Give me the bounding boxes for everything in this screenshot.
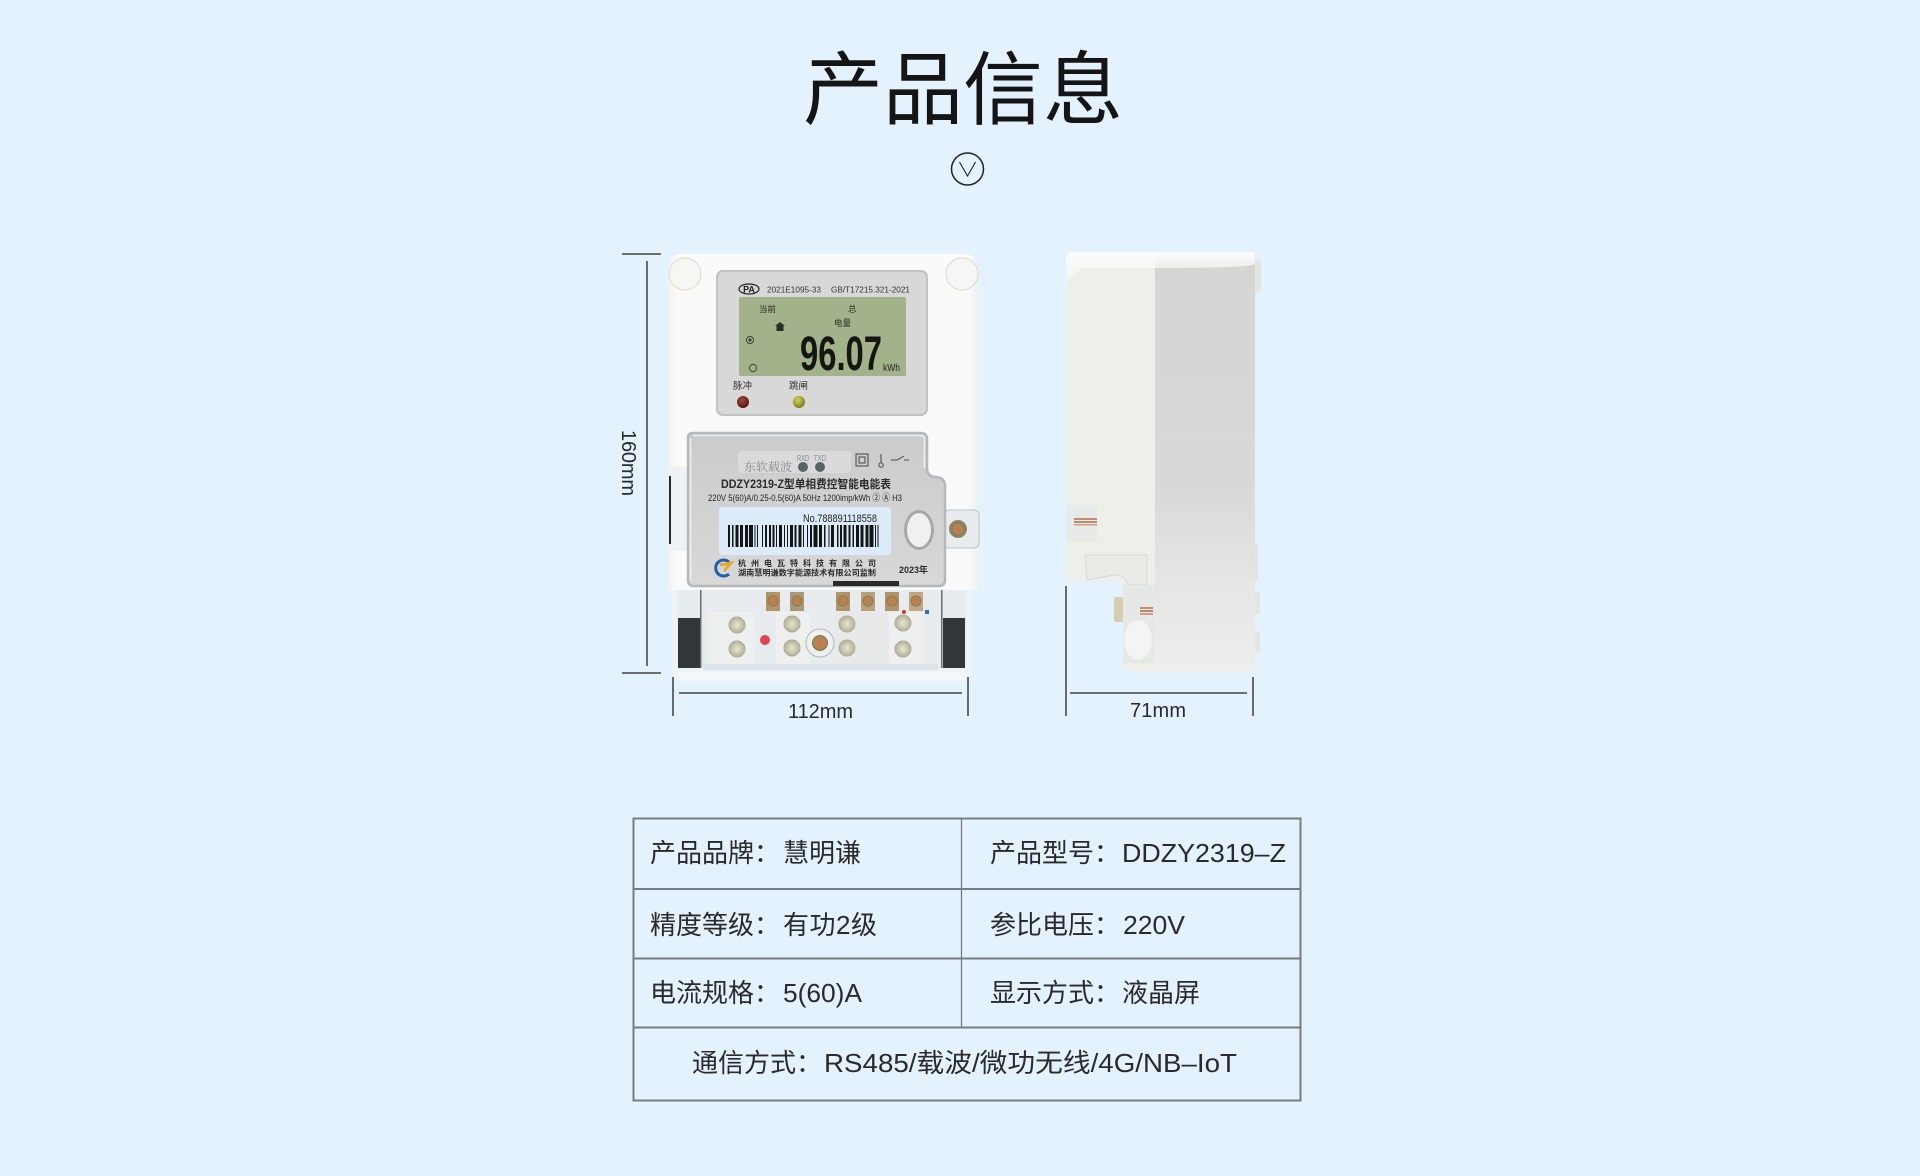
cell: voltage: 参比电压： — [990, 910, 1120, 940]
cell: accuracy — [650, 910, 877, 940]
dimension: 112mm: 112mm — [788, 701, 853, 723]
model name: DDZY2319-Z型单相费控智能电能表 — [721, 477, 891, 491]
supervisor: 湖南慧明谦数字能源技术有限公司监制 — [738, 568, 876, 578]
casing left — [1066, 252, 1156, 672]
certificate number: 2021E1095-33 — [767, 286, 822, 294]
cell: accuracy: 有功2级 — [783, 910, 877, 940]
screw block — [944, 510, 979, 548]
carrier module label: 东软载波 — [744, 458, 792, 475]
RJ connector — [1066, 505, 1097, 542]
dimension: 160mm — [617, 254, 661, 673]
ratings: 220V 5(60)A/0.25-0.5(60)A 50Hz 1200imp/kWh ② Ⓐ H3 — [708, 493, 902, 504]
clip emboss — [1085, 555, 1147, 585]
pulse label: 脉冲 — [733, 380, 752, 392]
LCD screen: 总 — [848, 304, 857, 314]
cell: display: 液晶屏 — [1122, 978, 1200, 1008]
cell: display: 显示方式： — [990, 978, 1120, 1008]
terminal cover — [672, 586, 972, 682]
table: product specifications — [634, 818, 1300, 1100]
cell: voltage: 220V — [1123, 910, 1186, 940]
LCD panel — [717, 271, 927, 415]
carrier module label: RXD — [797, 454, 809, 463]
icon: logo — [716, 560, 731, 576]
icon: switch — [891, 456, 909, 460]
top terminals — [766, 592, 923, 611]
icon: double square — [856, 454, 868, 466]
cell: model: 产品型号： — [990, 838, 1120, 868]
cell: current — [650, 978, 863, 1008]
trip label: 跳闸 — [789, 380, 808, 392]
cell: display — [990, 978, 1200, 1008]
carrier module label: TXD — [814, 454, 826, 463]
corner screw covers — [669, 258, 978, 290]
cell: accuracy: 精度等级： — [650, 910, 780, 940]
side tabs — [1253, 259, 1261, 653]
icon: PA mark: PA — [743, 284, 755, 294]
cell: model: DDZY2319–Z — [1122, 838, 1286, 868]
top band — [1066, 252, 1255, 290]
cell: current: 电流规格： — [650, 978, 780, 1008]
cell: brand: 慧明谦 — [783, 838, 861, 868]
standard number: GB/T17215.321-2021 — [831, 286, 911, 294]
icon: PA mark — [739, 284, 759, 294]
LCD screen: 电量 — [834, 318, 852, 328]
clear block — [1114, 585, 1155, 663]
LCD screen: 96.07 — [800, 328, 882, 381]
side clip — [668, 467, 690, 551]
manufacturer: 杭州电瓦特科技有限公司 — [738, 558, 876, 568]
casing right — [1155, 252, 1255, 672]
carrier module label — [738, 451, 851, 475]
icon: thermometer — [879, 454, 883, 467]
push button — [904, 510, 934, 550]
cell: communication: 通信方式： — [692, 1048, 822, 1078]
LCD screen: kWh — [883, 363, 900, 374]
dimension: 112mm — [673, 677, 968, 723]
LCD screen — [739, 297, 906, 381]
pulse LED — [737, 396, 749, 408]
icon: chevron in circle — [952, 153, 984, 185]
cell: current: 5(60)A — [783, 978, 863, 1008]
LCD screen: 当前 — [759, 304, 777, 314]
nameplate — [688, 433, 945, 586]
year: 2023年 — [899, 564, 928, 575]
trip LED — [793, 396, 805, 408]
terminal screws — [728, 610, 929, 658]
meter body — [668, 254, 978, 590]
cell: voltage — [990, 910, 1186, 940]
dimension: 71mm: 71mm — [1130, 700, 1186, 722]
title: 产品信息 — [803, 26, 1123, 142]
panel: front view of meter — [668, 254, 979, 682]
cell: model — [990, 838, 1286, 868]
barcode label: No.788891118558 — [803, 513, 877, 525]
cell: brand: 产品品牌： — [650, 838, 780, 868]
cell: communication: RS485/载波/微功无线/4G/NB–IoT — [824, 1048, 1237, 1078]
dimension: 71mm — [1066, 586, 1253, 722]
cell: brand — [650, 838, 861, 868]
panel: side view of meter — [1066, 252, 1261, 672]
barcode label — [719, 507, 891, 555]
dimension: 160mm: 160mm — [617, 430, 639, 496]
